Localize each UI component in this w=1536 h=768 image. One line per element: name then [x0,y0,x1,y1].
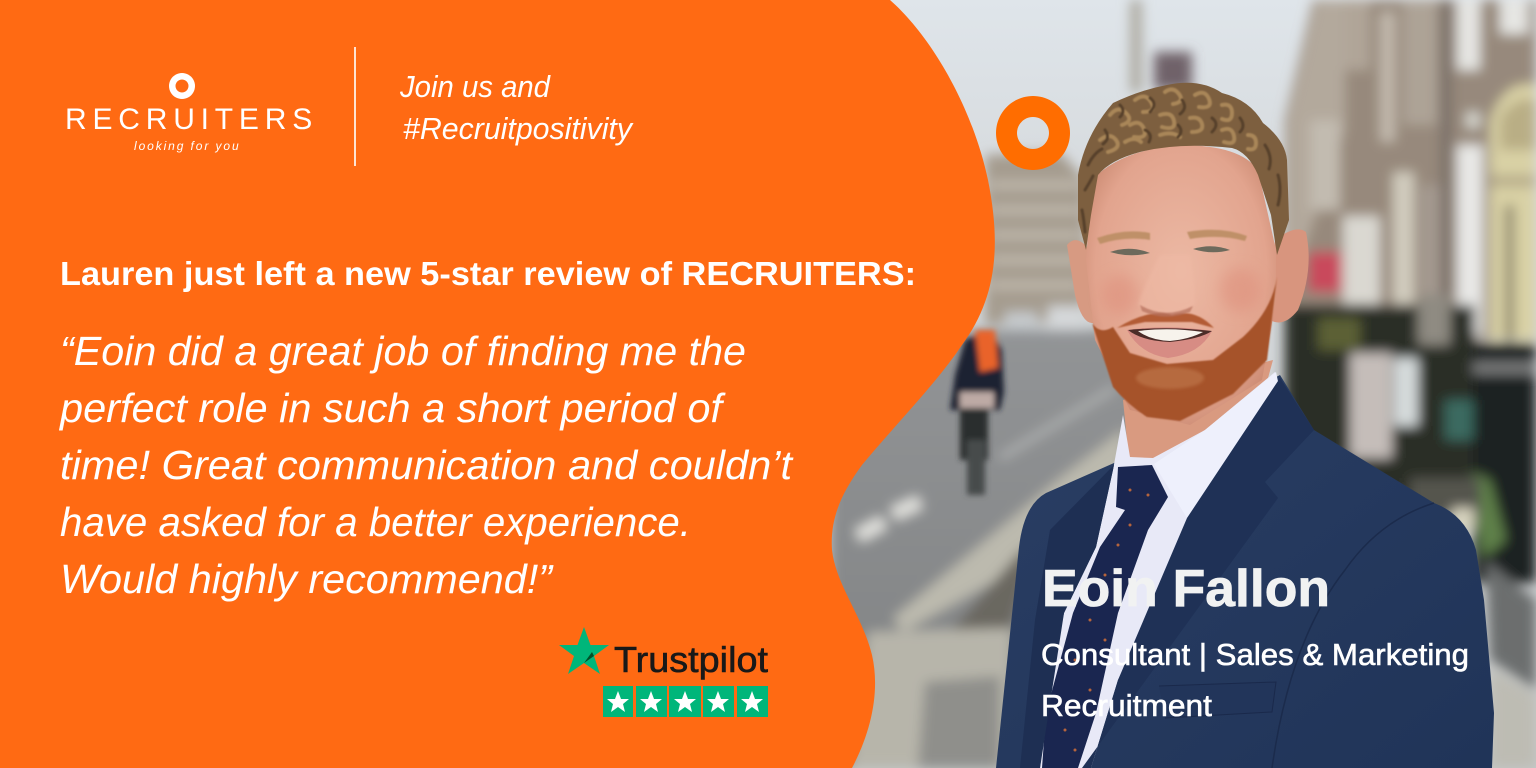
left ear [1067,240,1094,323]
consultant role: Consultant | Sales & Marketing [1041,637,1469,672]
review quote: have asked for a better experience. [60,499,691,545]
review heading: Lauren just left a new 5-star review of RECRUITERS: [60,255,916,292]
mouth [1127,327,1212,358]
jacket lapels [1020,378,1314,768]
neck [1123,360,1273,500]
review quote: “Eoin did a great job of finding me the [60,328,746,374]
jacket seam [1272,503,1434,768]
logo wordmark: RECRUITERS [65,103,318,136]
cyclist [950,330,1004,495]
jacket pocket [1159,682,1276,718]
Trustpilot badge [559,627,768,717]
logo tagline: looking for you [134,139,241,153]
consultant role [1041,637,1469,723]
suit jacket [996,375,1494,768]
tie [1042,465,1168,768]
shirt [1040,372,1282,768]
hashtag callout: Join us and [399,69,552,104]
logo: Recruiters [65,73,318,153]
consultant role: Recruitment [1041,688,1212,723]
orange ring decoration [996,96,1070,170]
hair [1078,83,1289,255]
shirt collar [1154,372,1282,518]
beard [1092,277,1277,421]
moustache [1117,313,1214,328]
review quote: perfect role in such a short period of [58,385,726,431]
consultant name: Eoin Fallon [1042,560,1330,618]
Trustpilot star [559,627,609,674]
review quote: time! Great communication and couldn’t [60,442,794,488]
nose [1138,255,1195,317]
Trustpilot star shadow [584,652,594,663]
hashtag callout: #Recruitpositivity [403,111,634,146]
teeth [1128,328,1212,342]
eyes and brows [1097,230,1247,255]
cheek shading [1102,268,1260,315]
logo ring icon [169,73,195,99]
divider [354,47,356,166]
face [1086,145,1276,425]
hair curls [1082,89,1280,232]
review quote [58,328,794,602]
chin patch [1136,367,1204,389]
Trustpilot wordmark: Trustpilot [614,639,768,680]
orange wave panel [0,0,995,768]
hashtag callout [399,69,634,146]
review quote: Would highly recommend!” [60,556,554,602]
five star rating [603,686,768,717]
right ear [1270,229,1309,322]
photo background: street scene [830,0,1536,768]
person portrait [996,83,1494,768]
